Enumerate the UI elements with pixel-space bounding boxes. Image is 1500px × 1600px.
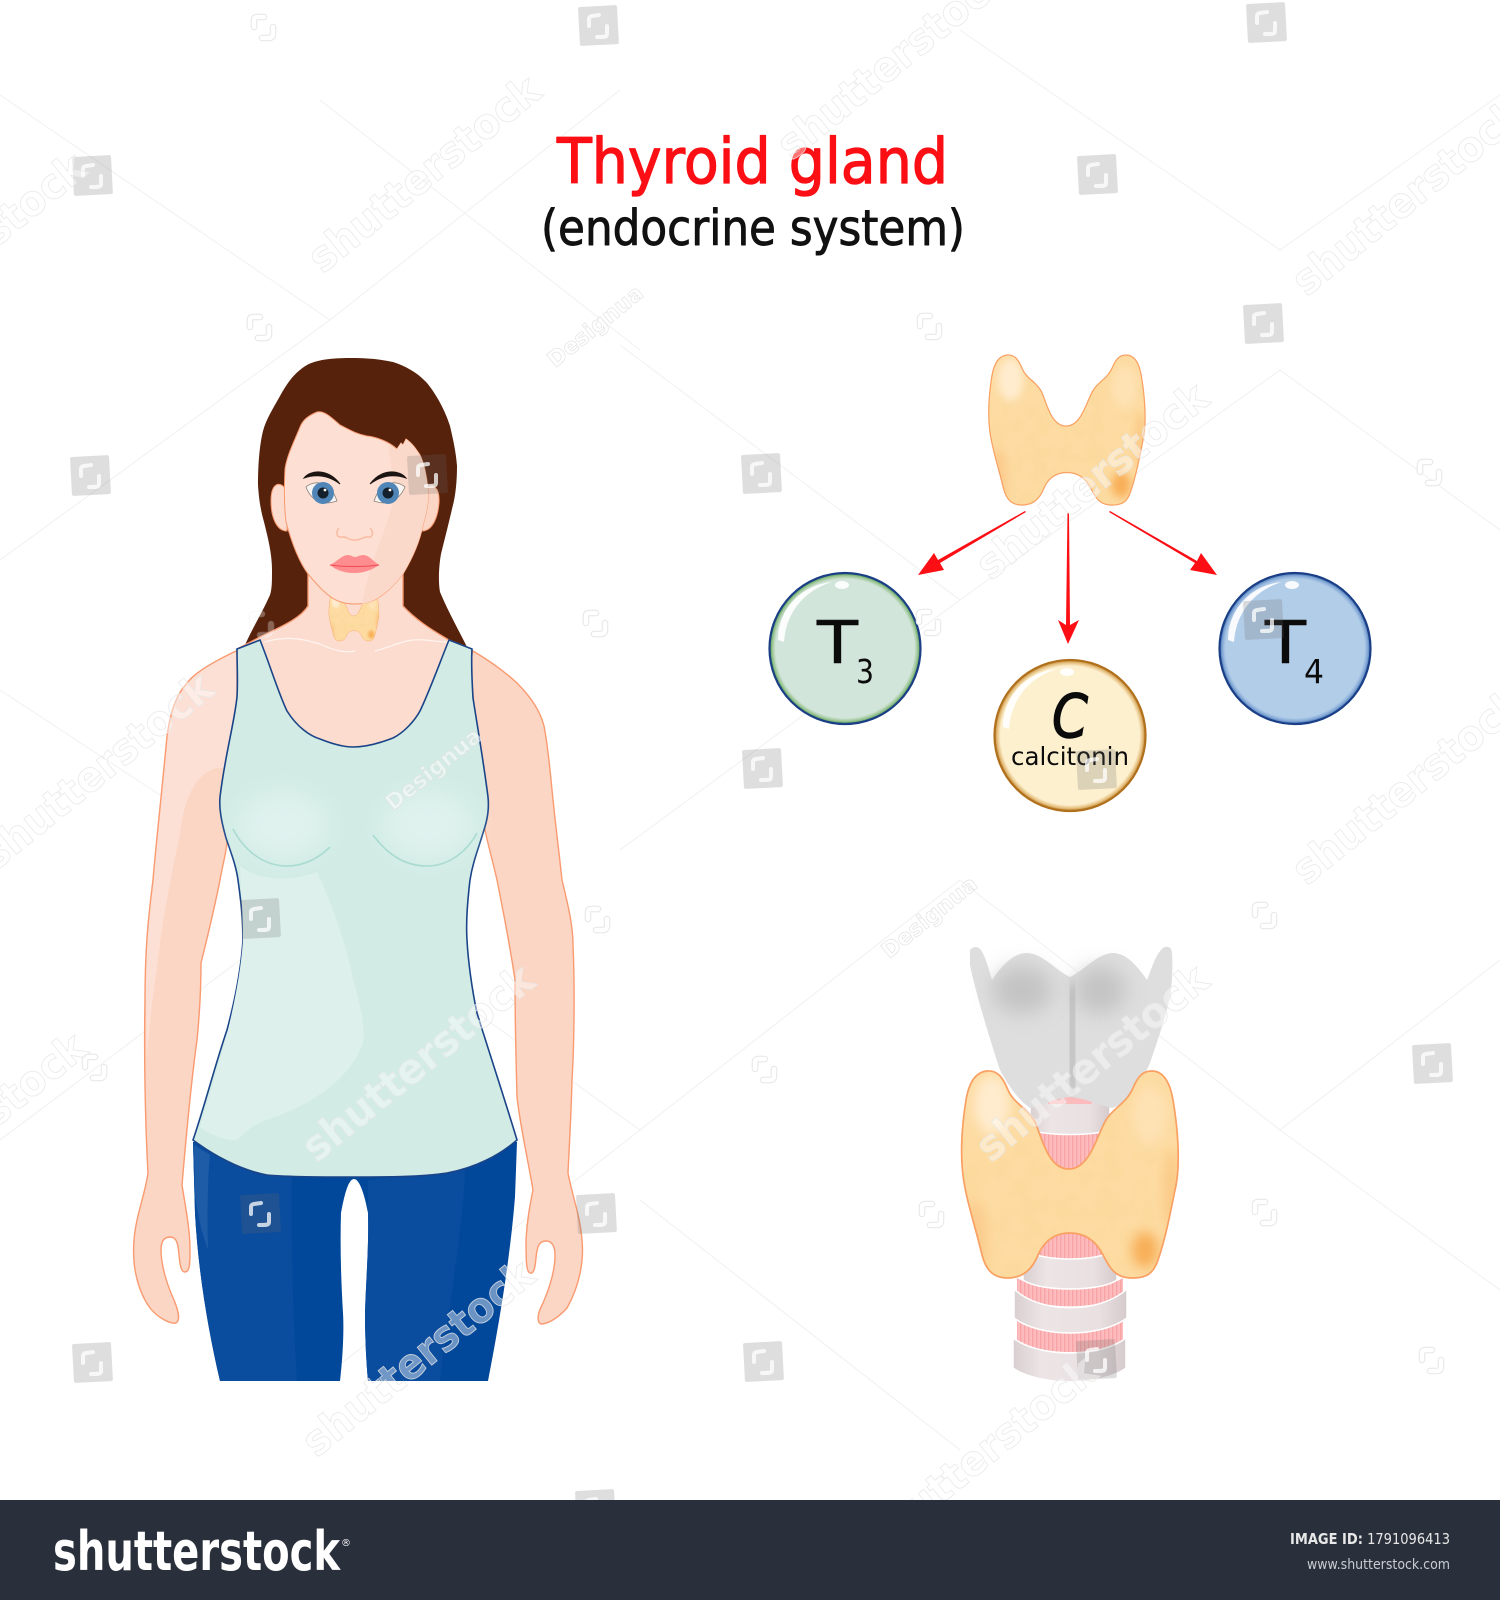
hormone bubble: T4 bbox=[1220, 573, 1370, 724]
collarbones bbox=[265, 638, 447, 652]
tracheal ring 3 bbox=[1014, 1278, 1127, 1333]
arrow: to calcitonin bbox=[1058, 513, 1079, 644]
thyroid cartilage bbox=[970, 947, 1172, 1108]
footer registered mark: ® bbox=[341, 1538, 351, 1549]
label: 3: 3 bbox=[856, 652, 874, 691]
left eyebrow bbox=[304, 472, 340, 484]
tracheal ring 4 bbox=[1013, 1320, 1126, 1382]
title bbox=[541, 125, 965, 257]
lips bbox=[330, 555, 379, 573]
tracheal ring 2 bbox=[1023, 1228, 1117, 1289]
left eye bbox=[306, 482, 337, 504]
subheading: endocrine system: (endocrine system) bbox=[541, 200, 965, 257]
footer url: www.shutterstock.com bbox=[1307, 1557, 1450, 1573]
watermark Designua: Designua bbox=[543, 281, 649, 373]
label: T: T bbox=[1264, 608, 1307, 677]
watermark small marks bbox=[85, 17, 1441, 1371]
hormone bubble: T3 bbox=[770, 573, 920, 724]
watermark Designua: Designua bbox=[381, 724, 487, 816]
watermark text: shutterstock bbox=[292, 1249, 544, 1466]
jeans bbox=[193, 1142, 517, 1381]
thyroid lobes bbox=[960, 1069, 1182, 1281]
right arm bbox=[470, 651, 582, 1324]
watermark Designua bbox=[381, 281, 983, 964]
watermark text: shutterstock bbox=[854, 1346, 1106, 1563]
tank top highlight bbox=[200, 866, 364, 1140]
watermark text: shutterstock bbox=[966, 954, 1218, 1171]
footer image id: IMAGE ID: 1791096413 bbox=[1290, 1530, 1450, 1548]
right eyebrow bbox=[370, 472, 406, 484]
face shading bbox=[362, 439, 428, 604]
left ear bbox=[271, 484, 287, 531]
label: T: T bbox=[816, 608, 859, 677]
left arm highlight bbox=[146, 652, 237, 1060]
right breast shading bbox=[373, 793, 477, 866]
label: 4: 4 bbox=[1304, 652, 1324, 691]
arrow: to T3 bbox=[918, 511, 1026, 575]
hair bbox=[245, 358, 467, 647]
face bbox=[284, 412, 428, 604]
nose bbox=[337, 528, 372, 540]
neck and chest bbox=[237, 565, 472, 758]
arrow: to T4 bbox=[1109, 511, 1217, 575]
small thyroid on neck bbox=[329, 593, 380, 642]
watermark text: shutterstock bbox=[966, 372, 1218, 589]
tank top bbox=[193, 640, 517, 1177]
watermark Designua: Designua bbox=[877, 872, 983, 964]
watermark text: shutterstock bbox=[298, 65, 550, 282]
label: C: C bbox=[1052, 682, 1088, 752]
footer logo: shutterstock bbox=[53, 1520, 341, 1583]
watermark text: shutterstock bbox=[292, 954, 544, 1171]
footer bar bbox=[0, 1500, 1500, 1600]
tracheal ring 1 bbox=[1030, 1096, 1110, 1172]
left arm bbox=[134, 651, 240, 1323]
woman figure bbox=[134, 358, 582, 1381]
right ear bbox=[422, 486, 439, 531]
right eye bbox=[374, 482, 405, 504]
label: calcitonin: calcitonin bbox=[1011, 742, 1129, 771]
larynx and trachea with thyroid bbox=[960, 947, 1182, 1382]
hormone bubble: calcitonin bbox=[994, 660, 1146, 811]
left breast shading bbox=[233, 793, 330, 866]
heading: Thyroid gland: Thyroid gland bbox=[556, 125, 948, 198]
thyroid gland icon bbox=[988, 354, 1148, 507]
